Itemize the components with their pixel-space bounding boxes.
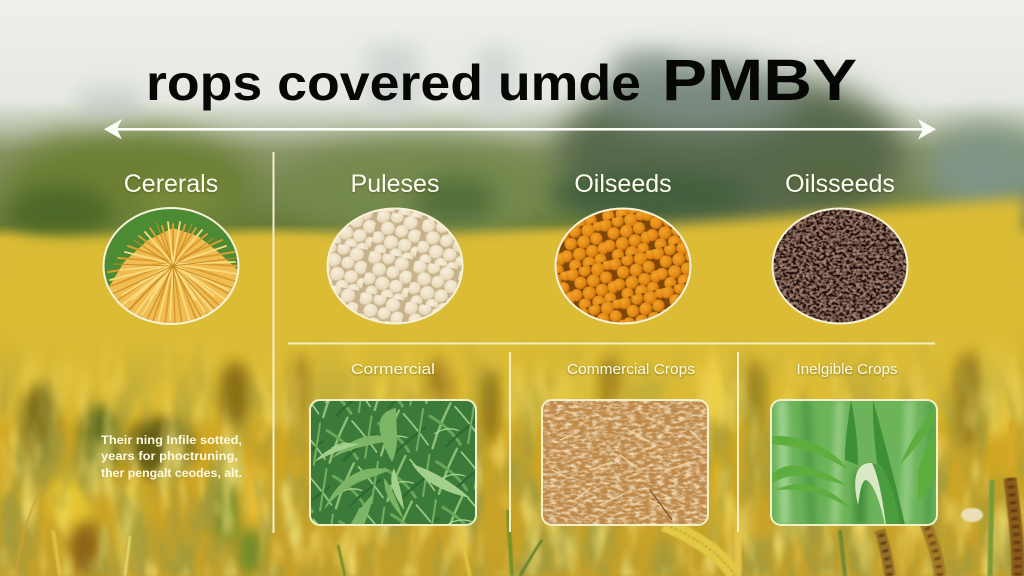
title: PMBY	[662, 48, 857, 113]
heading: Puleses: Puleses	[351, 170, 439, 198]
panel: oilseeds	[556, 170, 690, 324]
vertical divider: lower row right	[737, 352, 739, 532]
icon: pulses circle	[328, 208, 462, 324]
vertical divider: cereals column	[272, 152, 274, 533]
panel: cereals	[104, 170, 238, 324]
icon: orange oilseeds circle	[556, 208, 690, 324]
title	[146, 48, 857, 113]
text block: note: years for phoctruning,	[101, 449, 238, 463]
panel: commercial crops	[542, 362, 708, 525]
title: rops covered umde	[146, 55, 641, 111]
heading: Cererals: Cererals	[124, 170, 218, 198]
heading: Oilsseeds: Oilsseeds	[785, 170, 895, 198]
image: green leaves	[771, 400, 937, 525]
panel: second oilseeds	[772, 170, 908, 324]
text block: note	[101, 433, 242, 480]
double-headed arrow under title	[104, 119, 936, 140]
heading: Commercial: Cormercial	[351, 362, 435, 378]
icon: cereal circle	[104, 208, 238, 324]
vertical divider: lower row left	[509, 352, 511, 532]
image: green crop	[310, 400, 476, 525]
panel: pulses	[328, 170, 462, 324]
heading: Oilseeds: Oilseeds	[574, 170, 672, 198]
text block: note: ther pengalt ceodes, alt.	[101, 466, 242, 480]
heading: Ineligible Crops: Inelgible Crops	[796, 362, 898, 378]
text block: note: Their ning Infile sotted,	[101, 433, 242, 447]
heading: Commercial Crops: Commercial Crops	[567, 362, 695, 378]
panel: commercial	[310, 362, 476, 525]
panel: ineligible crops	[771, 362, 937, 525]
image: straw	[542, 400, 708, 525]
icon: dark seeds circle	[772, 208, 908, 324]
horizontal divider: lower row	[288, 342, 935, 344]
